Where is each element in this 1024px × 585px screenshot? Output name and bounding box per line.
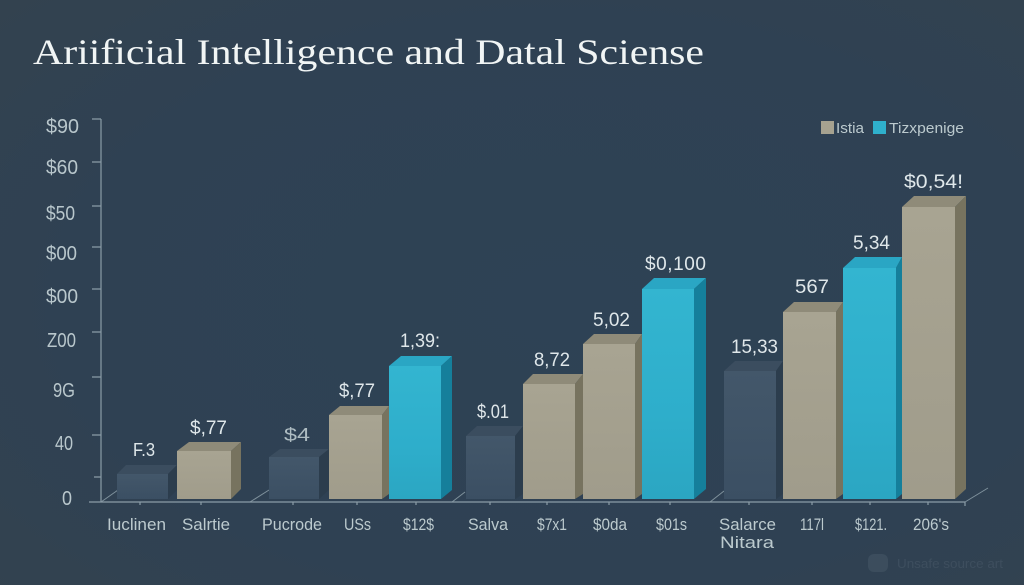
legend bbox=[821, 120, 964, 137]
bar value labels: $,77 bbox=[339, 381, 375, 402]
bar value labels: $0,54! bbox=[904, 172, 963, 193]
x axis category labels: $12$ bbox=[403, 515, 434, 534]
bar value labels: F.3 bbox=[133, 440, 155, 460]
x axis category labels: $7x1 bbox=[537, 515, 567, 534]
bar value labels: 5,34 bbox=[853, 233, 890, 254]
bar 3: navy bbox=[269, 449, 329, 499]
bar value labels: $,77 bbox=[190, 418, 227, 439]
bar value labels: $4 bbox=[284, 425, 310, 445]
bar 1: navy bbox=[117, 465, 177, 499]
y axis bbox=[92, 119, 101, 502]
bar value labels: 567 bbox=[795, 277, 829, 298]
x axis category labels: $0da bbox=[593, 515, 627, 534]
y axis labels: 9G bbox=[53, 380, 75, 402]
bar value labels: $0,100 bbox=[645, 254, 706, 275]
watermark: Unsafe source art bbox=[897, 556, 1003, 571]
bar 4: beige bbox=[329, 406, 389, 499]
x axis category labels: Pucrode bbox=[262, 515, 322, 534]
floor guide lines bbox=[101, 488, 988, 502]
bar 11: beige bbox=[783, 302, 843, 499]
y axis labels: Z00 bbox=[47, 330, 76, 352]
legend label: blue: Tizxpenige bbox=[889, 120, 964, 137]
bar value labels: 8,72 bbox=[534, 350, 570, 371]
y axis labels: $90 bbox=[46, 116, 79, 138]
x axis category labels: Iuclinen bbox=[107, 515, 166, 534]
bar 10: navy bbox=[724, 361, 783, 499]
bar 5: blue bbox=[389, 356, 452, 499]
x axis category labels bbox=[107, 515, 949, 552]
title: Ariificial Intelligence and Datal Sciense bbox=[33, 32, 704, 72]
watermark bbox=[868, 554, 1003, 572]
legend swatch: blue bbox=[873, 121, 886, 134]
bar 2: beige bbox=[177, 442, 241, 499]
x axis category labels: Salrtie bbox=[182, 515, 230, 534]
bar 12: blue bbox=[843, 257, 902, 499]
x axis category labels: $01s bbox=[656, 515, 687, 534]
bar 7: beige bbox=[523, 374, 583, 499]
x axis category labels: Salarce bbox=[719, 515, 776, 534]
x axis category labels: Nitara bbox=[720, 533, 775, 552]
x axis category labels: Salva bbox=[468, 515, 509, 534]
x axis category labels: USs bbox=[344, 515, 371, 534]
bar 8: beige bbox=[583, 334, 642, 499]
bar value labels: $.01 bbox=[477, 402, 509, 423]
x axis category labels: 206's bbox=[913, 515, 949, 534]
y axis labels: $60 bbox=[46, 157, 78, 179]
y axis labels: 40 bbox=[55, 433, 73, 455]
y axis labels: $00 bbox=[46, 243, 77, 265]
x axis bbox=[89, 502, 965, 506]
bar 9: blue bbox=[642, 278, 706, 499]
y axis labels: $00 bbox=[46, 286, 78, 308]
x axis category labels: $121. bbox=[855, 515, 887, 534]
y axis labels bbox=[46, 116, 79, 510]
x axis category labels: 117l bbox=[800, 515, 824, 534]
bar value labels bbox=[133, 172, 963, 460]
y axis labels: 0 bbox=[62, 488, 72, 510]
legend swatch: beige bbox=[821, 121, 834, 134]
bar 13: beige bbox=[902, 196, 966, 499]
bar 6: navy bbox=[466, 426, 523, 499]
bar value labels: 15,33 bbox=[731, 337, 778, 358]
legend label: beige: Istia bbox=[836, 120, 865, 137]
bar value labels: 5,02 bbox=[593, 310, 630, 331]
bar value labels: 1,39: bbox=[400, 331, 440, 352]
y axis labels: $50 bbox=[46, 203, 75, 225]
